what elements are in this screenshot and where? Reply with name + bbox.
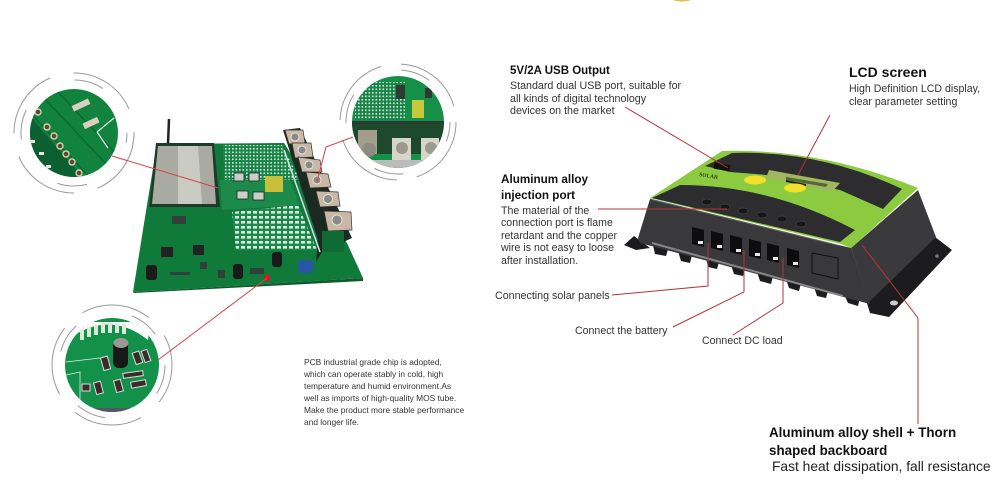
- yellow buttons: [744, 176, 806, 192]
- antenna: [168, 119, 169, 144]
- label: USB output: Standard dual USB port, suitable for: [510, 80, 682, 92]
- callout circle: top-left board detail: [14, 73, 134, 193]
- yellow capacitor: [265, 176, 283, 192]
- label: injection port: injection port: [501, 189, 575, 202]
- circuit board: [133, 143, 363, 292]
- front face: [638, 199, 870, 304]
- PCB description text: which can operate stably in cold, high: [303, 369, 444, 379]
- PCB description text: well as imports of high-quality MOS tube.: [303, 393, 456, 403]
- label: injection port: wire is not easy to loose: [500, 242, 614, 254]
- blue button: [298, 260, 313, 273]
- PCB description text: [303, 357, 464, 427]
- port knockout outline: [812, 253, 838, 279]
- terminal ports: [692, 227, 799, 268]
- label: DC load: Connect DC load: [702, 335, 783, 347]
- label: aluminum shell: Aluminum alloy shell + Thorn: [769, 425, 956, 440]
- decorative arcs: [52, 305, 172, 425]
- label: USB output: [510, 65, 682, 117]
- PCB description text: Make the product more stable performance: [304, 405, 464, 415]
- green top cover: [650, 151, 918, 248]
- label: LCD screen: [849, 64, 980, 108]
- label: aluminum shell: shaped backboard: [769, 443, 887, 458]
- label: LCD screen: LCD screen: [849, 64, 927, 80]
- red marker: [264, 275, 270, 281]
- callout circle: bottom-left capacitor detail: [52, 305, 172, 425]
- front dark panel: [652, 185, 855, 242]
- board small parts: [170, 216, 264, 278]
- label: injection port: [500, 173, 617, 267]
- label: USB output: all kinds of digital technology: [510, 93, 647, 105]
- LCD screen: [766, 170, 840, 192]
- electrolytic capacitors: [146, 252, 282, 280]
- tact switches: [161, 245, 204, 257]
- label: LCD screen: High Definition LCD display,: [849, 83, 980, 95]
- label: injection port: after installation.: [501, 255, 578, 267]
- label: USB output: devices on the market: [510, 105, 615, 117]
- label: aluminum shell: [769, 425, 991, 474]
- screw terminals: [283, 128, 352, 262]
- callout circle: top-right terminal detail: [340, 64, 456, 180]
- left mounting ear: [624, 236, 650, 250]
- label: injection port: connection port is flame: [501, 217, 613, 229]
- connector dots: [702, 199, 806, 227]
- perforated pad grid: [223, 145, 300, 180]
- label: USB output: 5V/2A USB Output: [510, 65, 610, 77]
- right mounting flange: [866, 237, 952, 317]
- decorative arcs: [14, 73, 134, 193]
- metal shield: [149, 143, 220, 207]
- callout lines: controller: [598, 107, 918, 424]
- label: injection port: Aluminum alloy: [501, 173, 589, 186]
- PCB description text: temperature and humid environment.As: [304, 381, 451, 391]
- label: battery: Connect the battery: [575, 325, 668, 337]
- brand label: SOLAR: [699, 172, 719, 181]
- label: LCD screen: clear parameter setting: [849, 96, 957, 108]
- label: injection port: The material of the: [501, 205, 589, 217]
- PCB description text: and longer life.: [304, 417, 359, 427]
- solar charge controller: [624, 151, 952, 317]
- decorative arcs: [340, 64, 456, 180]
- bottom feet: [653, 245, 860, 306]
- label: injection port: retardant and the copper: [501, 230, 617, 242]
- top edge mark: [674, 0, 690, 2]
- PCB board photo: [133, 119, 363, 293]
- usb port: [714, 163, 730, 171]
- label: solar panels: Connecting solar panels: [495, 290, 610, 302]
- rear dark panel: [705, 153, 902, 209]
- smd components: [234, 173, 264, 200]
- PCB description text: PCB industrial grade chip is adopted,: [304, 357, 442, 367]
- label: aluminum shell: Fast heat dissipation, fall resistance: [772, 459, 991, 474]
- green front corner: [841, 235, 860, 248]
- callout lines: PCB: [112, 137, 353, 360]
- side face: [851, 190, 936, 302]
